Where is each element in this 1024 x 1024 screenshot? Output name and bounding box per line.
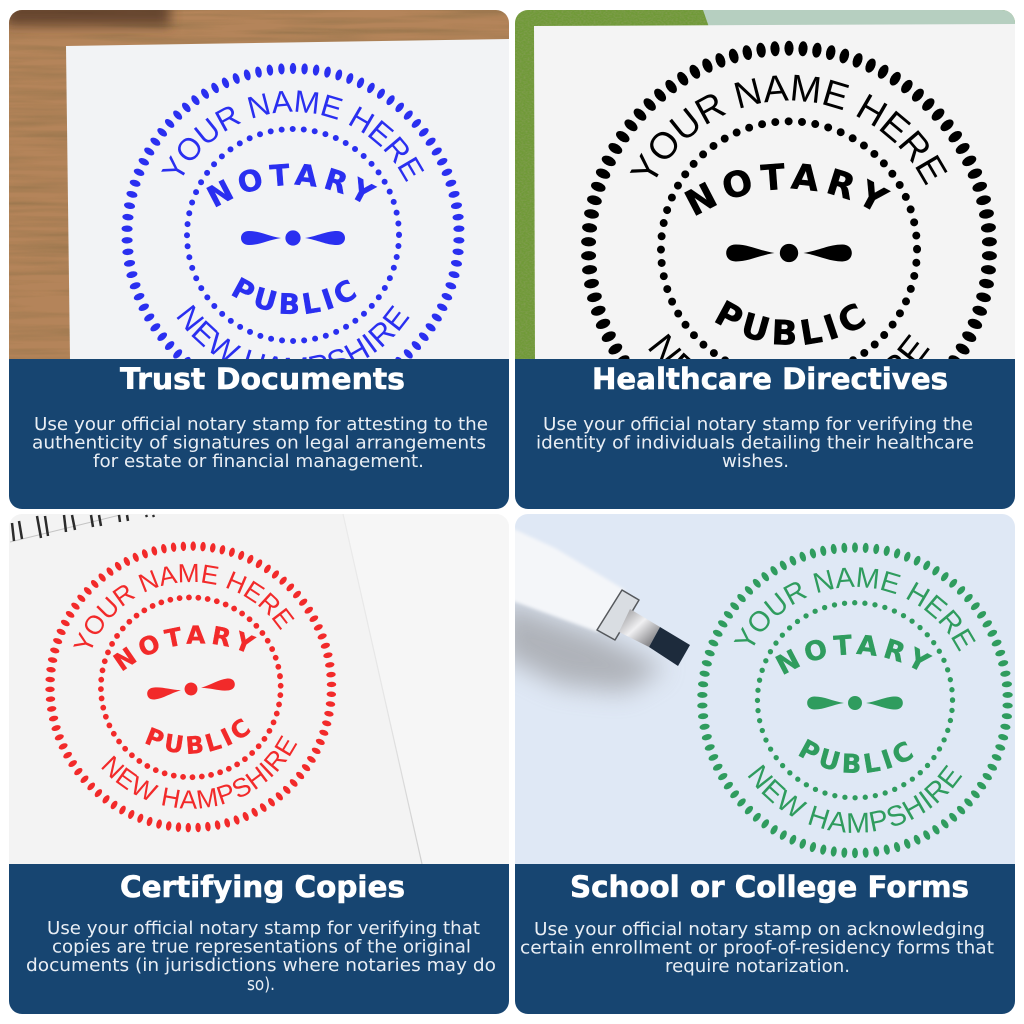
stamp: black: PUBLIC	[714, 300, 866, 345]
pale green cloth corner	[703, 10, 1015, 26]
description: for estate or financial management.	[93, 451, 424, 472]
description: certain enrollment or proof-of-residency forms that	[520, 938, 994, 958]
description: Use your official notary stamp for verifying the	[543, 414, 973, 435]
panel: healthcare directives	[515, 10, 1015, 509]
pen shadow	[500, 600, 665, 692]
description	[26, 918, 496, 995]
icon: pen	[505, 525, 690, 666]
pen body	[515, 530, 624, 632]
description: copies are true representations of the original	[52, 936, 471, 958]
stamp: green: NOTARY	[775, 634, 932, 675]
caption banner	[515, 359, 1015, 509]
pen cuff	[597, 590, 639, 640]
facing page	[343, 514, 509, 864]
description	[32, 414, 488, 472]
stamp: blue: PUBLIC	[232, 277, 356, 314]
stamp: blue: NEW HAMPSHIRE	[176, 304, 410, 359]
description: authenticity of signatures on legal arrangements	[32, 432, 486, 454]
desk shadow	[5, 0, 170, 26]
heading: Trust Documents	[120, 362, 405, 396]
stamp: red: NEW HAMPSHIRE	[101, 735, 298, 809]
stamp: red: PUBLIC	[145, 718, 250, 754]
stamp: blue: YOUR NAME HERE	[161, 90, 424, 182]
caption banner	[9, 864, 509, 1014]
stamp: green: PUBLIC	[798, 738, 914, 773]
panel: trust documents	[9, 10, 509, 509]
heading: Healthcare Directives	[592, 362, 948, 396]
caption banner	[9, 359, 509, 509]
photo: wood desk background	[9, 10, 509, 360]
heading: Certifying Copies	[120, 870, 405, 904]
description	[520, 919, 994, 977]
stamp: red: NOTARY	[112, 625, 257, 671]
stamp: black: NOTARY	[684, 163, 891, 216]
pen nib	[649, 627, 690, 666]
photo: pale blue paper	[515, 514, 1015, 864]
paper sheet	[66, 39, 510, 360]
stamp: red: YOUR NAME HERE	[73, 564, 294, 648]
notebook spiral binding	[10, 515, 154, 542]
paper sheet	[534, 24, 1015, 360]
description: require notarization.	[665, 956, 850, 977]
description: Use your official notary stamp for attesting to the	[34, 414, 488, 435]
description: documents (in jurisdictions where notaries may do	[26, 955, 496, 976]
photo: white notebook page	[9, 514, 421, 864]
panel: certifying copies	[9, 514, 509, 1014]
panel: school or college forms	[515, 514, 1015, 1014]
metal collar	[619, 609, 660, 647]
stamp: black	[581, 40, 997, 618]
stamp: green: YOUR NAME HERE	[734, 567, 976, 652]
photo: green cloth background	[515, 10, 1015, 360]
description: Use your official notary stamp for verifying that	[47, 918, 480, 939]
stamp: green: NEW HAMPSHIRE	[748, 764, 962, 833]
description: Use your official notary stamp on acknowledging	[534, 919, 985, 940]
page fold line	[343, 514, 422, 864]
stamp: black: YOUR NAME HERE	[630, 74, 948, 186]
description	[538, 416, 973, 468]
caption banner	[515, 864, 1015, 1014]
description: identity of individuals detailing their healthcare	[536, 432, 974, 454]
heading: School or College Forms	[570, 870, 969, 904]
stamp: black: NEW HAMPSHIRE	[648, 334, 930, 359]
stamp: blue	[122, 62, 464, 359]
stamp: red	[45, 541, 336, 832]
stamp: blue: NOTARY	[206, 164, 378, 208]
stamp: green	[697, 542, 1013, 858]
description: so).	[247, 974, 275, 995]
description: wishes.	[722, 451, 789, 472]
